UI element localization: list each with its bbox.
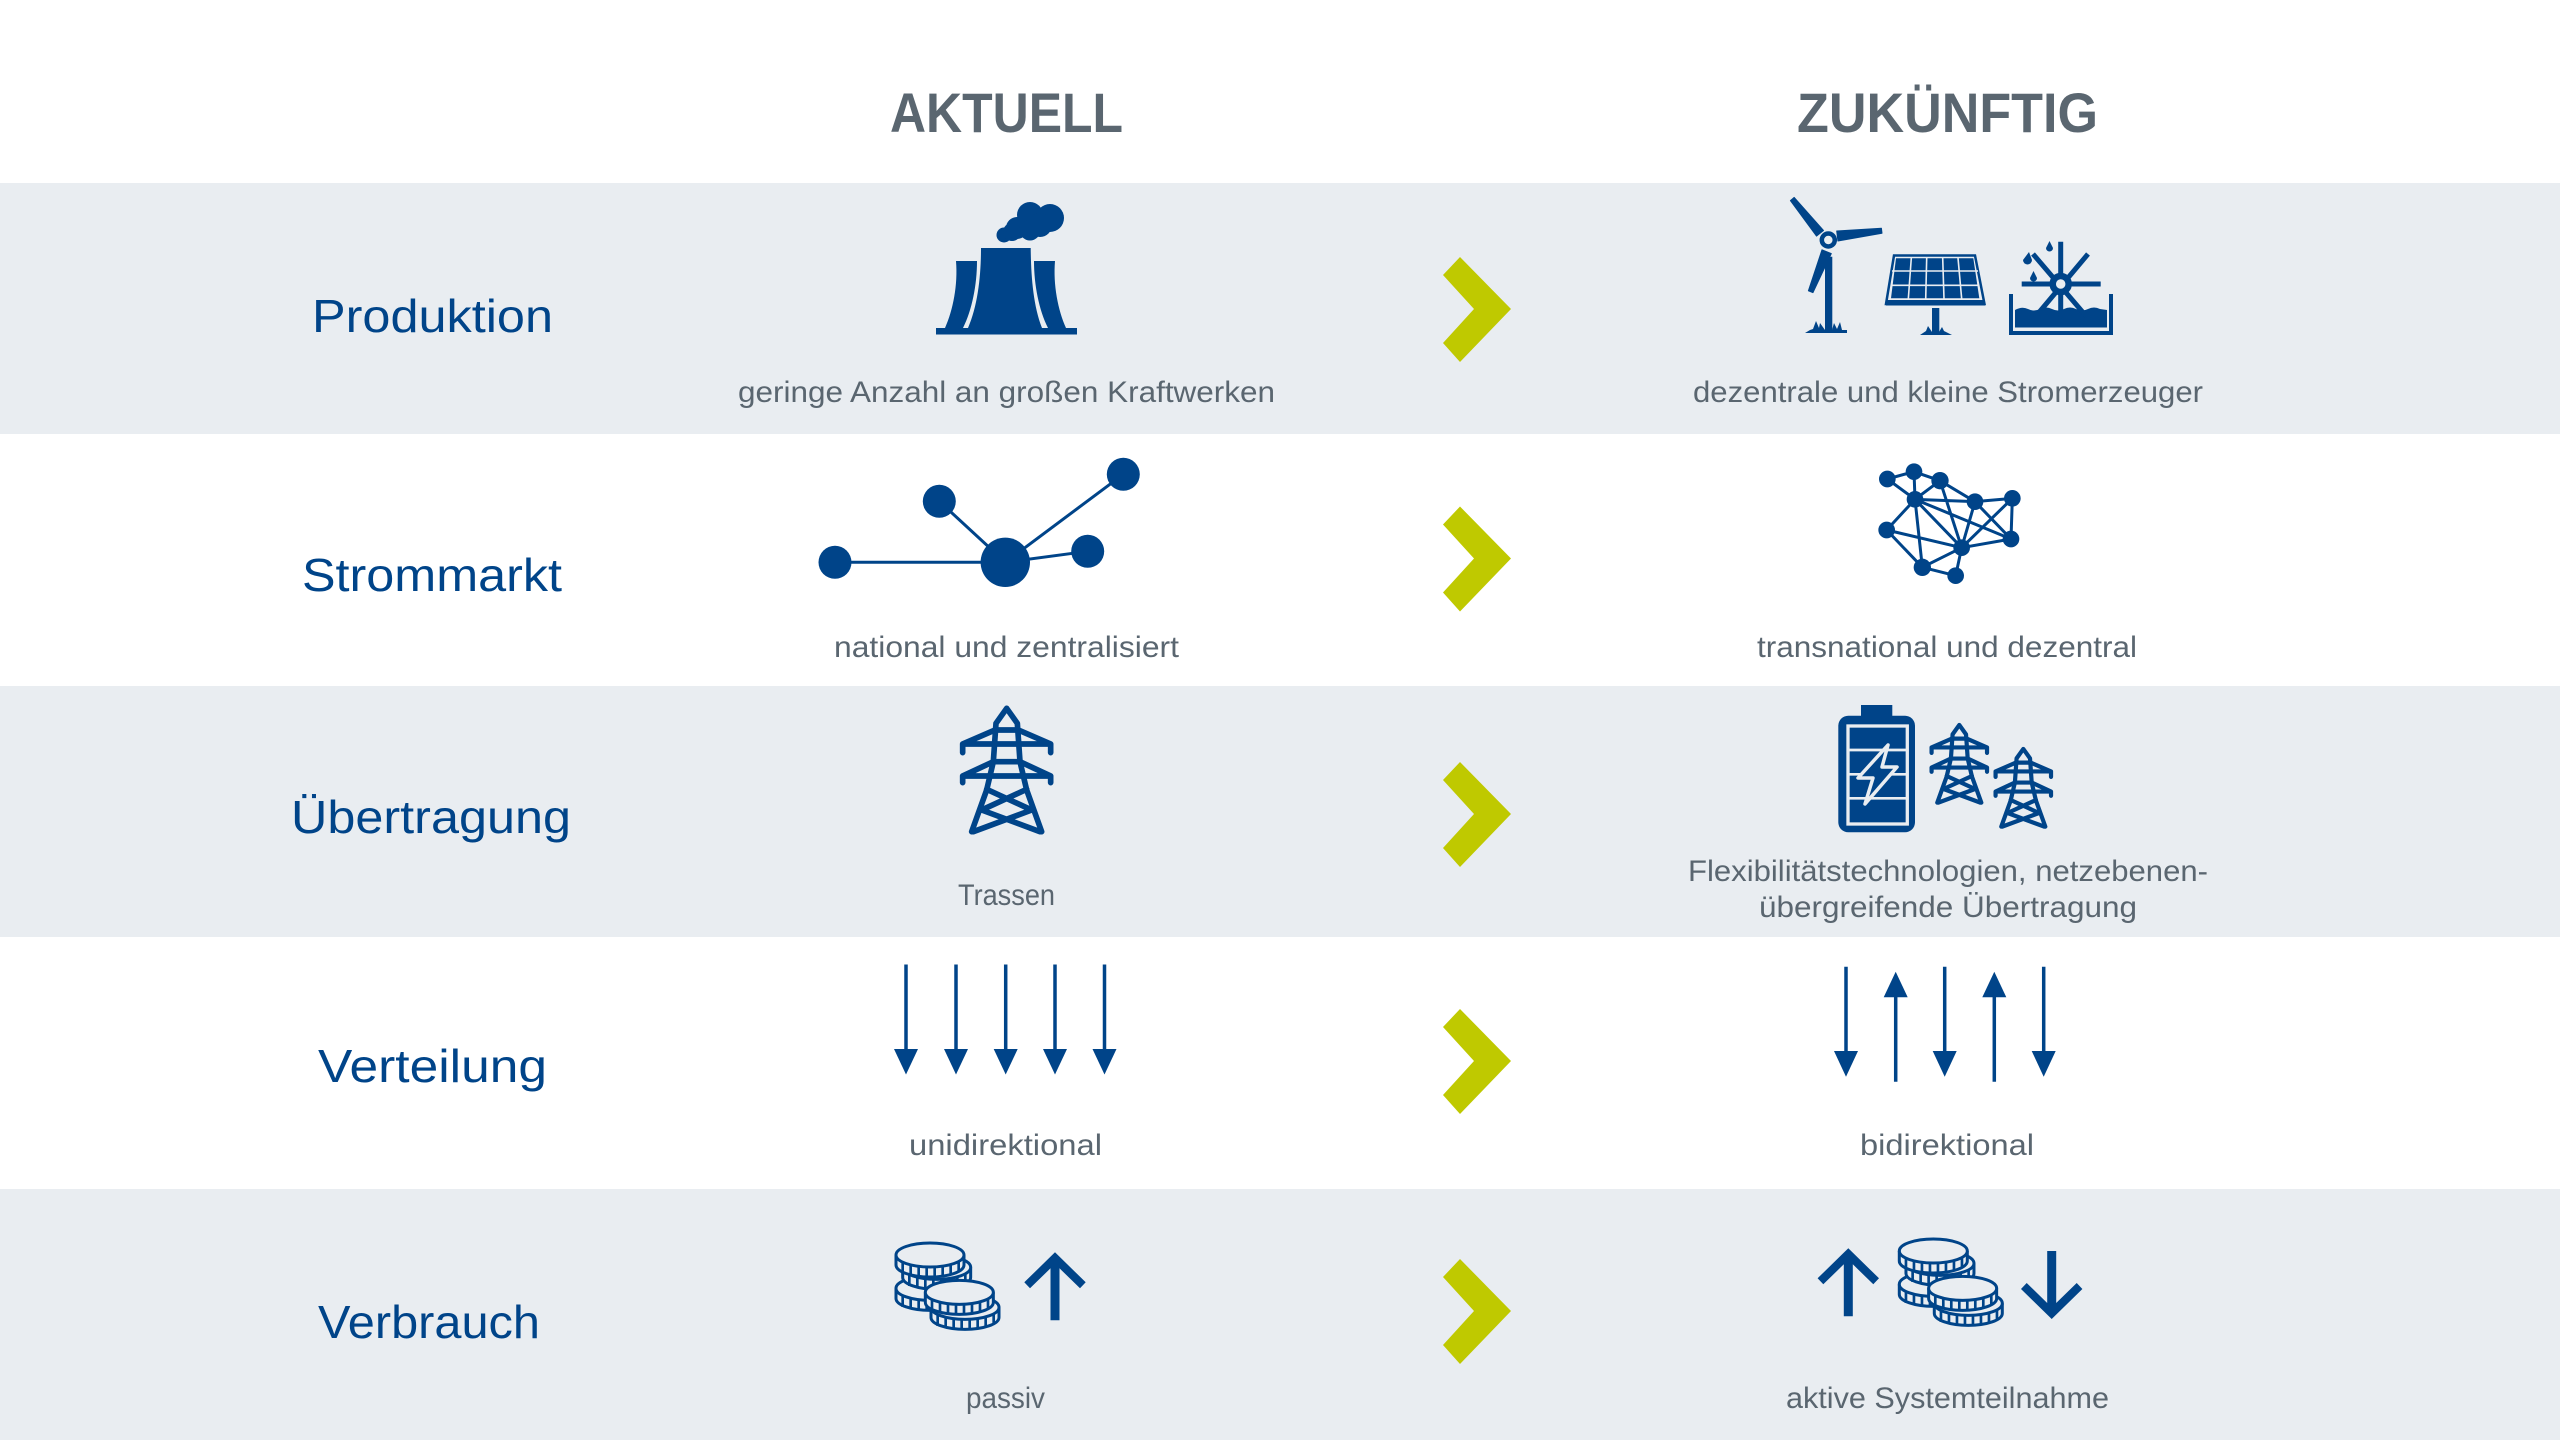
panel: Verbrauch: [0, 1189, 2560, 1440]
icon: coins: [896, 1243, 999, 1329]
icon: small transmission tower A: [1932, 725, 1987, 803]
icon: coins right: [1899, 1239, 2002, 1325]
arrow chevron 1: [1443, 257, 1511, 362]
row label: Verbrauch: Verbrauch: [318, 1296, 540, 1348]
icon: centralized network: [818, 458, 1140, 587]
icon: up arrow: [1024, 1252, 1086, 1320]
caption: Flexibilitätstechnologien line 1: Flexibilitätstechnologien, netzebenen-: [1688, 855, 2208, 888]
icon: water wheel: [2011, 241, 2111, 333]
row label: Verteilung: Verteilung: [318, 1040, 547, 1092]
arrow chevron 5: [1443, 1259, 1511, 1364]
panel: Verteilung: [0, 937, 2560, 1189]
panel: Übertragung: [0, 686, 2560, 937]
icon: bidirectional arrows: [1834, 967, 2056, 1082]
panel: Strommarkt: [0, 434, 2560, 686]
icon: decentralized network: [1878, 463, 2021, 584]
arrow chevron 2: [1443, 506, 1511, 612]
icon: unidirectional arrows: [894, 964, 1116, 1074]
caption: aktive Systemteilnahme: aktive Systemteilnahme: [1786, 1382, 2109, 1415]
caption: geringe Anzahl: geringe Anzahl an großen Kraftwerken: [738, 376, 1275, 409]
caption: Trassen: Trassen: [958, 879, 1055, 912]
caption: bidirektional: bidirektional: [1860, 1129, 2034, 1162]
icon: down arrow: [2021, 1251, 2082, 1319]
caption: dezentrale: dezentrale und kleine Stromerzeuger: [1693, 376, 2203, 409]
icon: cooling towers power plant: [936, 202, 1077, 334]
icon: small transmission tower B: [1996, 749, 2051, 827]
heading: AKTUELL: AKTUELL: [890, 81, 1123, 144]
icon: battery with lightning bolt: [1838, 705, 1915, 832]
caption: transnational: transnational und dezentral: [1757, 631, 2137, 664]
caption: passiv: passiv: [966, 1382, 1045, 1415]
row label: Übertragung: Übertragung: [291, 791, 571, 843]
row label: Strommarkt: Strommarkt: [302, 549, 562, 601]
icon: wind turbine: [1790, 197, 1882, 333]
caption: unidirektional: unidirektional: [909, 1129, 1102, 1162]
heading: ZUKÜNFTIG: ZUKÜNFTIG: [1797, 81, 2098, 144]
arrow chevron 4: [1443, 1009, 1511, 1114]
icon: solar panel: [1886, 256, 1985, 335]
caption: übergreifende line 2: übergreifende Übertragung: [1759, 891, 2137, 924]
caption: national: national und zentralisiert: [834, 631, 1180, 664]
icon: transmission tower: [963, 708, 1051, 832]
panel: Produktion: [0, 183, 2560, 434]
arrow chevron 3: [1443, 762, 1511, 867]
row label: Produktion: Produktion: [312, 290, 553, 342]
icon: up arrow right: [1818, 1248, 1879, 1316]
